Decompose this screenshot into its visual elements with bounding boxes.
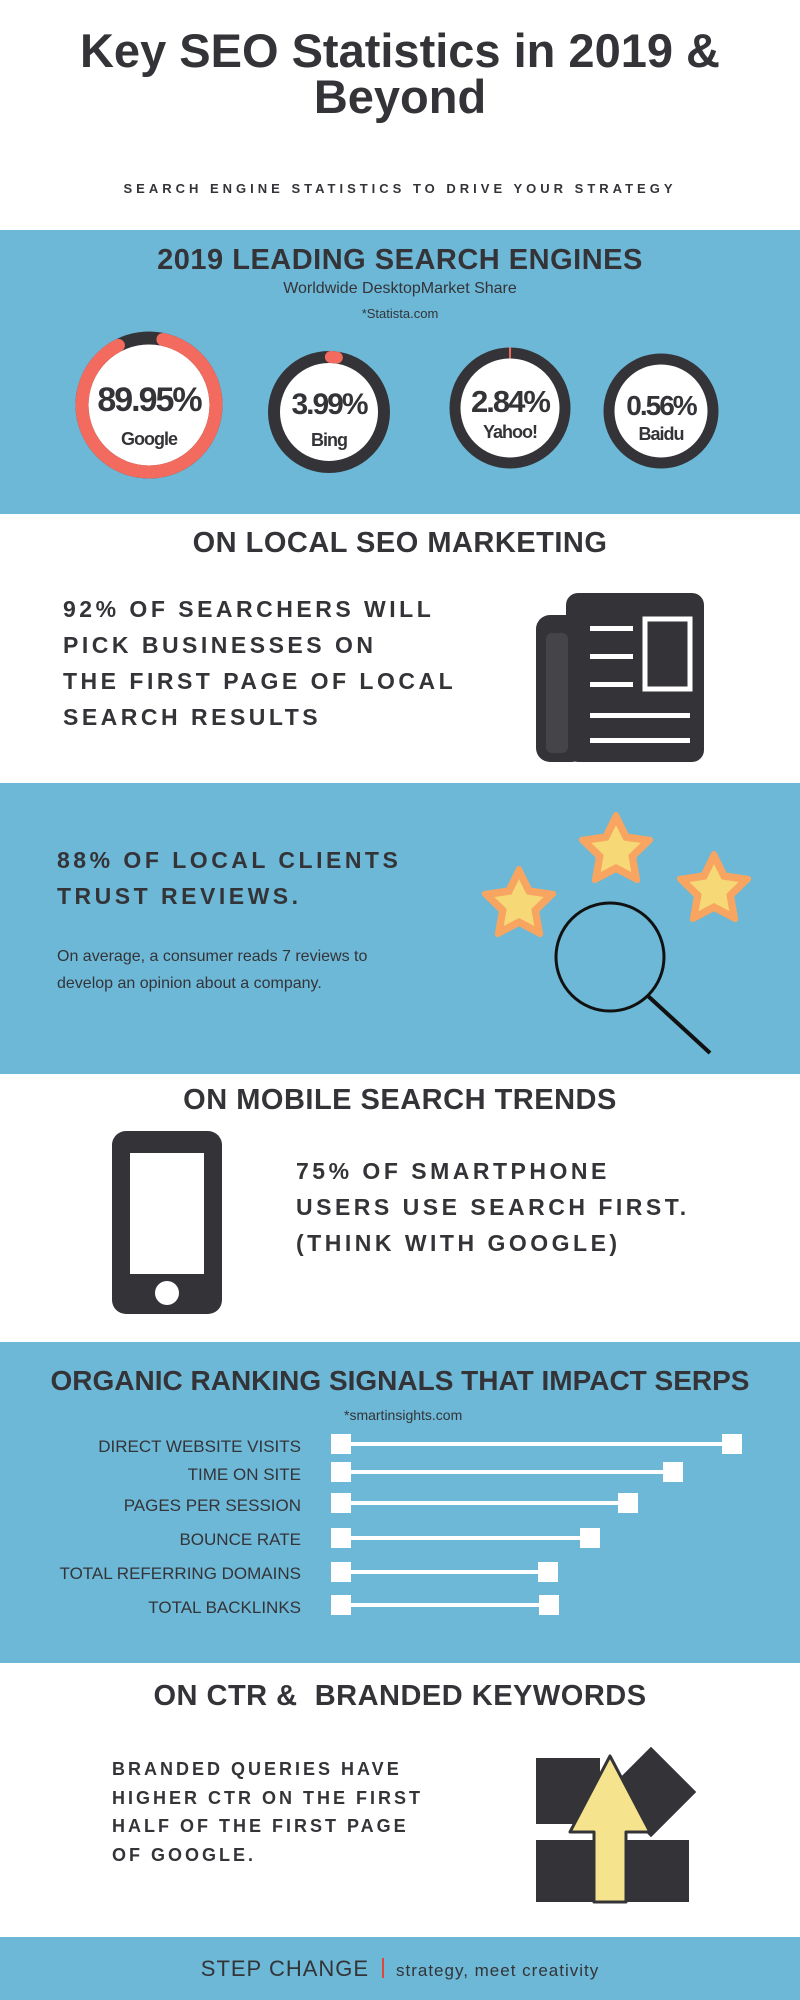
source note: *Statista.com: [362, 306, 438, 321]
bar chart labels: BOUNCE RATE: [179, 1530, 301, 1549]
donut: google: Google: [121, 429, 178, 449]
text block: branded queries: [112, 1759, 423, 1864]
heading: ranking signals: ORGANIC RANKING SIGNALS THAT IMPACT SERPS: [50, 1365, 749, 1396]
panel: search engines: [0, 230, 800, 514]
text block: 88%: TRUST REVIEWS.: [57, 883, 302, 909]
bar chart labels: TOTAL BACKLINKS: [148, 1598, 301, 1617]
text block: 92%: PICK BUSINESSES ON: [63, 632, 376, 658]
donut charts: [76, 332, 718, 478]
heading: leading search engines: 2019 LEADING SEARCH ENGINES: [157, 244, 643, 276]
donut: bing: Bing: [311, 430, 347, 450]
panel: organic ranking signals: [0, 1342, 800, 1663]
text block: reviews detail: develop an opinion about a company.: [57, 975, 322, 992]
text block: 92%: [63, 596, 456, 730]
donut: bing: 3.99%: [291, 388, 368, 421]
text block: 92%: SEARCH RESULTS: [63, 704, 321, 730]
heading: ctr: ON CTR & BRANDED KEYWORDS: [153, 1680, 647, 1712]
donut: baidu: Baidu: [638, 424, 684, 444]
icon: newspaper: [536, 593, 704, 762]
bar chart labels: TIME ON SITE: [188, 1465, 301, 1484]
source note: *smartinsights.com: [344, 1407, 462, 1423]
text block: 92%: THE FIRST PAGE OF LOCAL: [63, 668, 456, 694]
icon: stars and magnifier: [482, 812, 752, 1054]
donut: yahoo: Yahoo!: [483, 422, 537, 442]
title: [80, 24, 720, 123]
text block: 75%: USERS USE SEARCH FIRST.: [296, 1194, 690, 1220]
text block: branded queries: BRANDED QUERIES HAVE: [112, 1759, 402, 1779]
panel: reviews: [0, 783, 800, 1074]
footer: STEP CHANGE strategy, meet creativity: [201, 1956, 599, 1981]
text block: 92%: 92% OF SEARCHERS WILL: [63, 596, 434, 622]
text block: 88%: [57, 847, 401, 909]
subtitle: SEARCH ENGINE STATISTICS TO DRIVE YOUR STRATEGY: [123, 181, 676, 196]
bar chart labels: DIRECT WEBSITE VISITS: [98, 1437, 301, 1456]
text block: reviews detail: On average, a consumer reads 7 reviews to: [57, 948, 367, 965]
bar chart labels: TOTAL REFERRING DOMAINS: [60, 1564, 301, 1583]
icon: phone: [112, 1131, 222, 1314]
donut: baidu: [609, 359, 713, 463]
text block: 75%: (THINK WITH GOOGLE): [296, 1230, 621, 1256]
heading: mobile: ON MOBILE SEARCH TRENDS: [183, 1084, 617, 1116]
bar chart labels: [60, 1437, 301, 1617]
text block: 88%: 88% OF LOCAL CLIENTS: [57, 847, 401, 873]
text block: branded queries: HIGHER CTR ON THE FIRST: [112, 1788, 423, 1808]
text block: reviews detail: [57, 948, 367, 992]
donut: google: 89.95%: [97, 381, 202, 419]
footer: [0, 1937, 800, 2000]
donut: yahoo: [454, 352, 566, 464]
heading: local seo: ON LOCAL SEO MARKETING: [193, 527, 607, 559]
text block: 75%: [296, 1158, 690, 1256]
text block: branded queries: HALF OF THE FIRST PAGE: [112, 1816, 409, 1836]
donut: bing: [272, 355, 386, 469]
title: Key SEO Statistics in 2019 &: [80, 24, 720, 77]
donut: yahoo: 2.84%: [471, 384, 550, 419]
subheading: Worldwide DesktopMarket Share: [283, 280, 517, 297]
donut: google: [70, 326, 228, 484]
bar chart: [331, 1434, 742, 1615]
text block: 75%: 75% OF SMARTPHONE: [296, 1158, 610, 1184]
text block: branded queries: OF GOOGLE.: [112, 1844, 256, 1864]
donut: baidu: 0.56%: [626, 390, 698, 421]
title: Beyond: [314, 70, 486, 123]
bar chart labels: PAGES PER SESSION: [124, 1496, 301, 1515]
icon: ctr arrow: [536, 1746, 696, 1904]
